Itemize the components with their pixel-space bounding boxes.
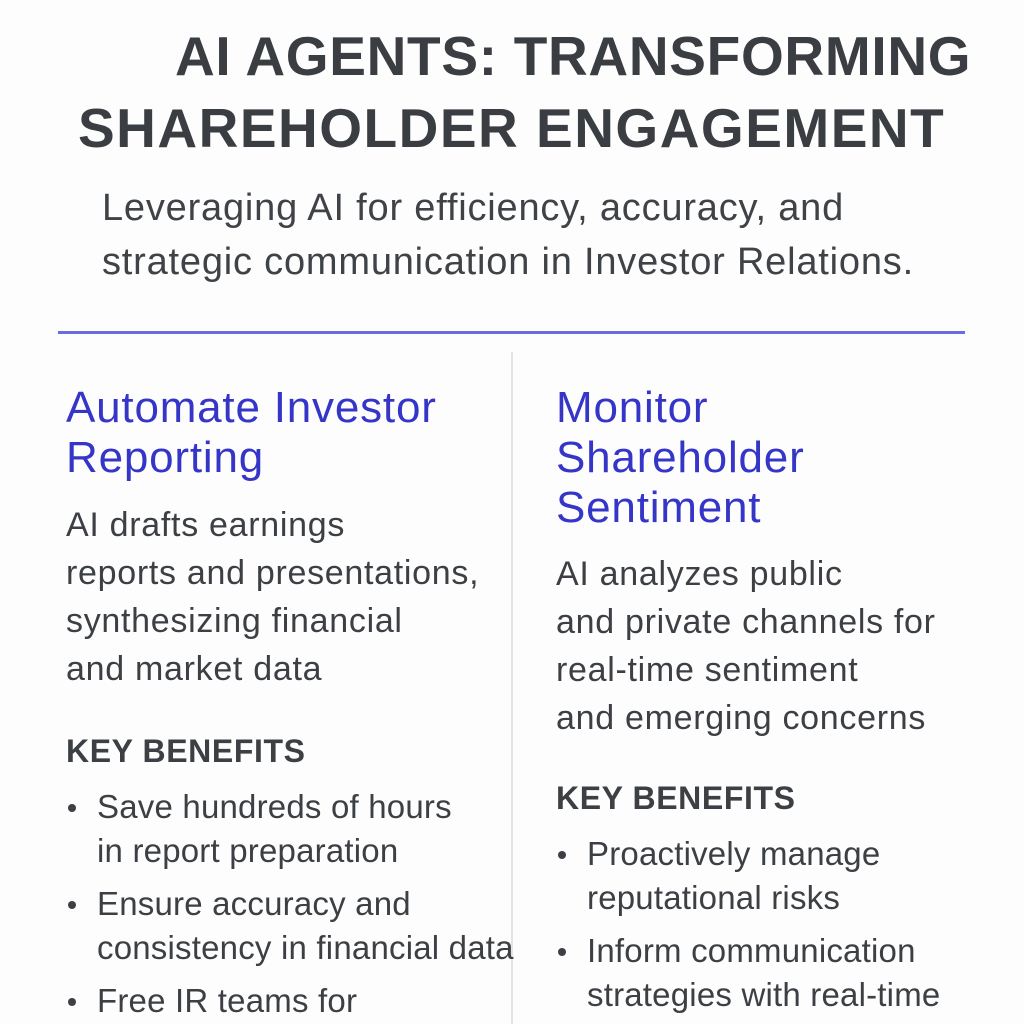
heading — [66, 383, 437, 482]
panel: automate investor reporting — [66, 383, 514, 1019]
subtitle: Leveraging AI for efficiency, accuracy, and — [102, 187, 844, 229]
title — [78, 25, 971, 159]
benefits list: in report preparation — [97, 832, 398, 869]
heading: Shareholder — [556, 433, 805, 482]
heading: Sentiment — [556, 483, 761, 532]
title: SHAREHOLDER ENGAGEMENT — [78, 97, 945, 159]
heading — [556, 383, 805, 532]
key benefits label: KEY BENEFITS — [66, 733, 306, 769]
benefits list: Proactively manage — [587, 835, 880, 872]
benefits list: Save hundreds of hours — [97, 788, 452, 825]
key benefits label: KEY BENEFITS — [556, 780, 796, 816]
subtitle — [102, 187, 914, 283]
subtitle: strategic communication in Investor Relations. — [102, 241, 914, 283]
description — [556, 555, 936, 737]
description: AI analyzes public — [556, 555, 843, 593]
description: and market data — [66, 650, 322, 688]
description — [66, 506, 479, 688]
description: real-time sentiment — [556, 651, 858, 689]
description: and emerging concerns — [556, 699, 926, 737]
heading: Monitor — [556, 383, 708, 432]
benefits list: consistency in financial data — [97, 929, 514, 966]
benefits list: strategies with real-time — [587, 976, 940, 1013]
benefits list — [558, 835, 940, 1013]
panel: monitor shareholder sentiment — [556, 383, 940, 1013]
heading: Automate Investor — [66, 383, 437, 432]
benefits list: Free IR teams for — [97, 982, 357, 1019]
benefits list: Ensure accuracy and — [97, 885, 411, 922]
heading: Reporting — [66, 433, 264, 482]
description: AI drafts earnings — [66, 506, 345, 544]
description: synthesizing financial — [66, 602, 403, 640]
benefits list: reputational risks — [587, 879, 840, 916]
benefits list: Inform communication — [587, 932, 916, 969]
description: and private channels for — [556, 603, 936, 641]
description: reports and presentations, — [66, 554, 479, 592]
benefits list — [68, 788, 514, 1019]
title: AI AGENTS: TRANSFORMING — [175, 25, 971, 87]
